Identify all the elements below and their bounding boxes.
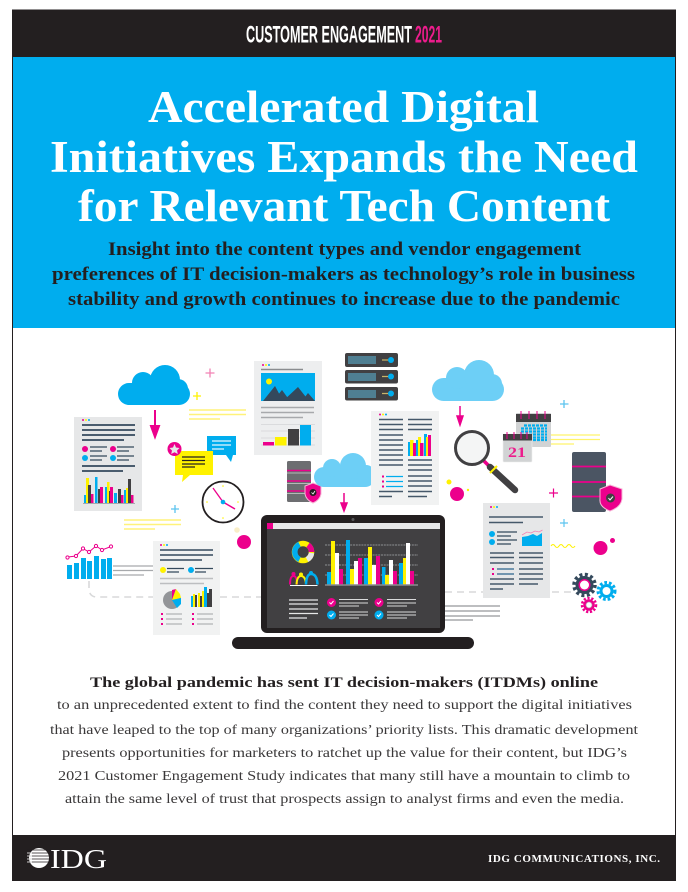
icon: light blue cloud right	[432, 360, 504, 401]
bar chart	[263, 425, 311, 446]
grey lines right of laptop	[445, 606, 500, 620]
line and bar chart	[66, 544, 153, 579]
main title: for Relevant Tech Content	[78, 181, 610, 231]
icon: gears	[574, 574, 615, 612]
laptop window bar	[267, 523, 440, 529]
donut chart	[294, 544, 312, 560]
icon: server racks	[345, 353, 398, 400]
company name: IDG COMMUNICATIONS, INC.	[488, 853, 660, 865]
gear: blue	[598, 582, 615, 600]
body text: The global pandemic has sent IT decision-makers (ITDMs) online	[90, 675, 598, 691]
main title	[50, 82, 638, 231]
subtitle: stability and growth continues to increase due to the pandemic	[68, 290, 620, 310]
subtitle: preferences of IT decision-makers as technology’s role in business	[52, 265, 635, 285]
icon: calendars	[503, 411, 551, 462]
icon: blue cloud left	[118, 365, 190, 405]
header band: 2021	[415, 22, 442, 48]
main title: Initiatives Expands the Need	[50, 132, 638, 182]
body text: presents opportunities for marketers to ratchet up the value for their content, but IDG’s	[62, 746, 627, 761]
header band: CUSTOMER ENGAGEMENT	[246, 22, 412, 48]
decorative plus, wave and dots right	[551, 519, 615, 555]
icon: chat bubbles with star	[168, 436, 236, 482]
decorative dots by magnifier	[446, 480, 469, 501]
document: two column text with bar chart	[371, 411, 439, 505]
arrow: cloud to document	[151, 410, 159, 437]
body text: that have leaped to the top of many organizations’ priority lists. This dramatic development	[50, 723, 638, 738]
body text	[50, 675, 638, 807]
main title: Accelerated Digital	[148, 82, 539, 132]
dashed connector lines	[89, 581, 572, 597]
pie chart	[163, 589, 181, 609]
body text: to an unprecedented extent to find the content they need to support the digital initiatives	[57, 698, 632, 713]
bar chart	[408, 434, 431, 456]
decorative plus and lines upper right	[549, 400, 600, 498]
header band	[12, 10, 676, 57]
document: text with area chart	[483, 503, 550, 598]
laptop base	[232, 637, 474, 649]
icon: calendars: 21	[508, 445, 526, 461]
icon: server with shield	[287, 461, 321, 503]
body text: 2021 Customer Engagement Study indicates that many still have a mountain to climb to	[58, 769, 630, 784]
laptop bar chart	[325, 540, 418, 585]
laptop text and checks	[289, 598, 416, 620]
IDG logo: IDG	[50, 844, 107, 874]
laptop	[232, 515, 474, 649]
icon: clock	[202, 482, 244, 522]
bar chart	[83, 477, 135, 504]
decorative dots by laptop	[234, 527, 251, 549]
landscape image	[261, 373, 315, 401]
title panel	[13, 57, 675, 328]
document: pie and bars	[153, 541, 220, 635]
document: checklist with bar chart	[74, 417, 142, 511]
decorative plus and lines middle left	[124, 505, 181, 529]
icon: magnifying glass	[456, 432, 515, 490]
footer band	[12, 835, 676, 881]
arrow: cloud to laptop	[341, 493, 347, 511]
document: report with landscape image	[254, 361, 322, 455]
decorative plus signs and lines upper left	[189, 368, 246, 419]
subtitle	[52, 240, 635, 310]
icon: large server with shield	[572, 452, 622, 512]
bar chart	[191, 587, 212, 607]
subtitle: Insight into the content types and vendor engagement	[108, 240, 582, 260]
gear: dark	[574, 574, 595, 596]
icon: light blue cloud center	[314, 453, 375, 487]
gear: pink	[582, 598, 596, 612]
arrow: cloud to magnifier	[457, 406, 463, 425]
people icons	[290, 571, 318, 586]
body text: attain the same level of trust that prospects assign to analyst firms and even the media.	[65, 792, 624, 807]
IDG logo	[27, 844, 107, 874]
